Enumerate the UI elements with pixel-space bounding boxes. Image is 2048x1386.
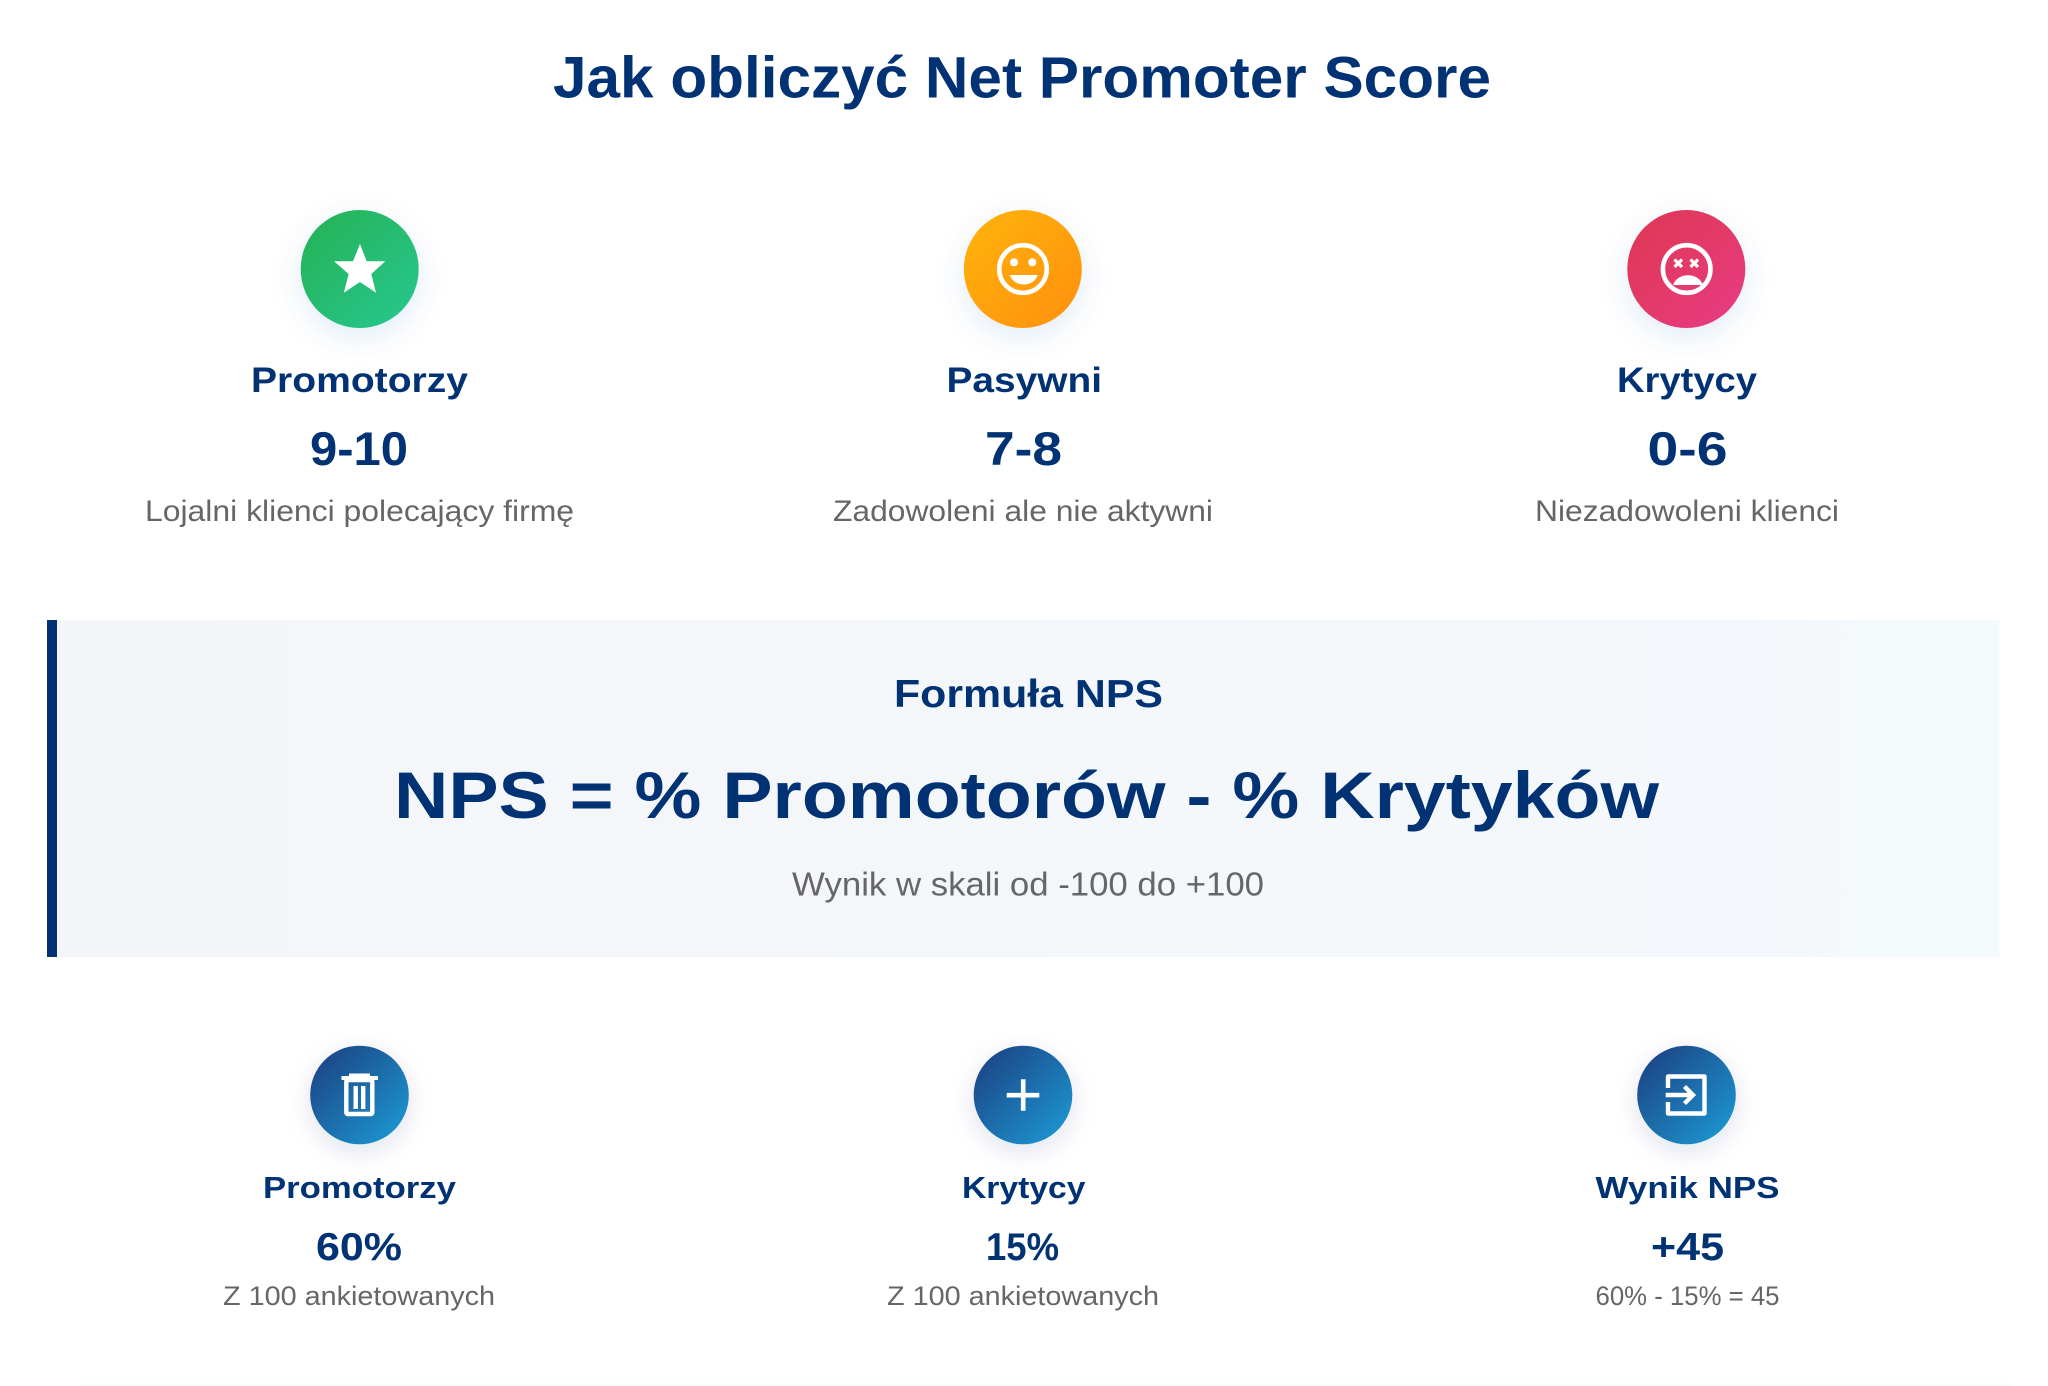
value: 15%: 15%	[986, 1226, 1059, 1269]
title: Jak obliczyć Net Promoter Score	[553, 46, 1491, 110]
icon: green star	[301, 210, 419, 328]
card: Promotorzy score group	[145, 210, 574, 528]
example: Promotorzy	[223, 1046, 495, 1311]
icon: orange smile	[964, 210, 1082, 328]
panel heading: Formuła NPS	[894, 673, 1163, 716]
value: 60%: 60%	[316, 1226, 402, 1269]
icon: enter arrow	[1637, 1046, 1736, 1144]
score: 9-10: 9-10	[310, 422, 408, 475]
heading: Wynik NPS: Wynik NPS	[1596, 1171, 1780, 1205]
note: 60% - 15% = 45	[1596, 1281, 1780, 1311]
heading: Krytycy: Krytycy	[1617, 361, 1758, 400]
value: +45: +45	[1651, 1226, 1724, 1269]
card: Pasywni score group	[833, 210, 1213, 528]
heading: Krytycy: Krytycy	[962, 1171, 1086, 1205]
description: Promotorzy: Lojalni klienci polecający firmę	[145, 495, 574, 528]
example: Wynik NPS	[1596, 1046, 1780, 1311]
score: 7-8: 7-8	[985, 422, 1062, 475]
panel accent bar	[47, 620, 57, 957]
formula: NPS = % Promotorów - % Krytyków	[394, 758, 1660, 832]
panel: NPS formula	[47, 620, 2000, 957]
description: Pasywni: Zadowoleni ale nie aktywni	[833, 495, 1213, 528]
panel background	[47, 620, 2000, 957]
icon: plus	[974, 1046, 1072, 1144]
note: Z 100 ankietowanych	[223, 1281, 495, 1311]
scale note: Wynik w skali od -100 do +100	[792, 866, 1264, 904]
note: Z 100 ankietowanych	[887, 1281, 1159, 1311]
heading: Pasywni: Pasywni	[946, 361, 1102, 400]
card: Krytycy score group	[1535, 210, 1839, 528]
heading: Promotorzy: Promotorzy	[263, 1171, 456, 1205]
score: 0-6: 0-6	[1648, 422, 1728, 475]
icon: trash	[310, 1046, 409, 1144]
icon: red dizzy face	[1627, 210, 1745, 328]
description: Krytycy: Niezadowoleni klienci	[1535, 495, 1839, 528]
heading: Promotorzy: Promotorzy	[251, 361, 469, 400]
example: Krytycy	[887, 1046, 1159, 1311]
